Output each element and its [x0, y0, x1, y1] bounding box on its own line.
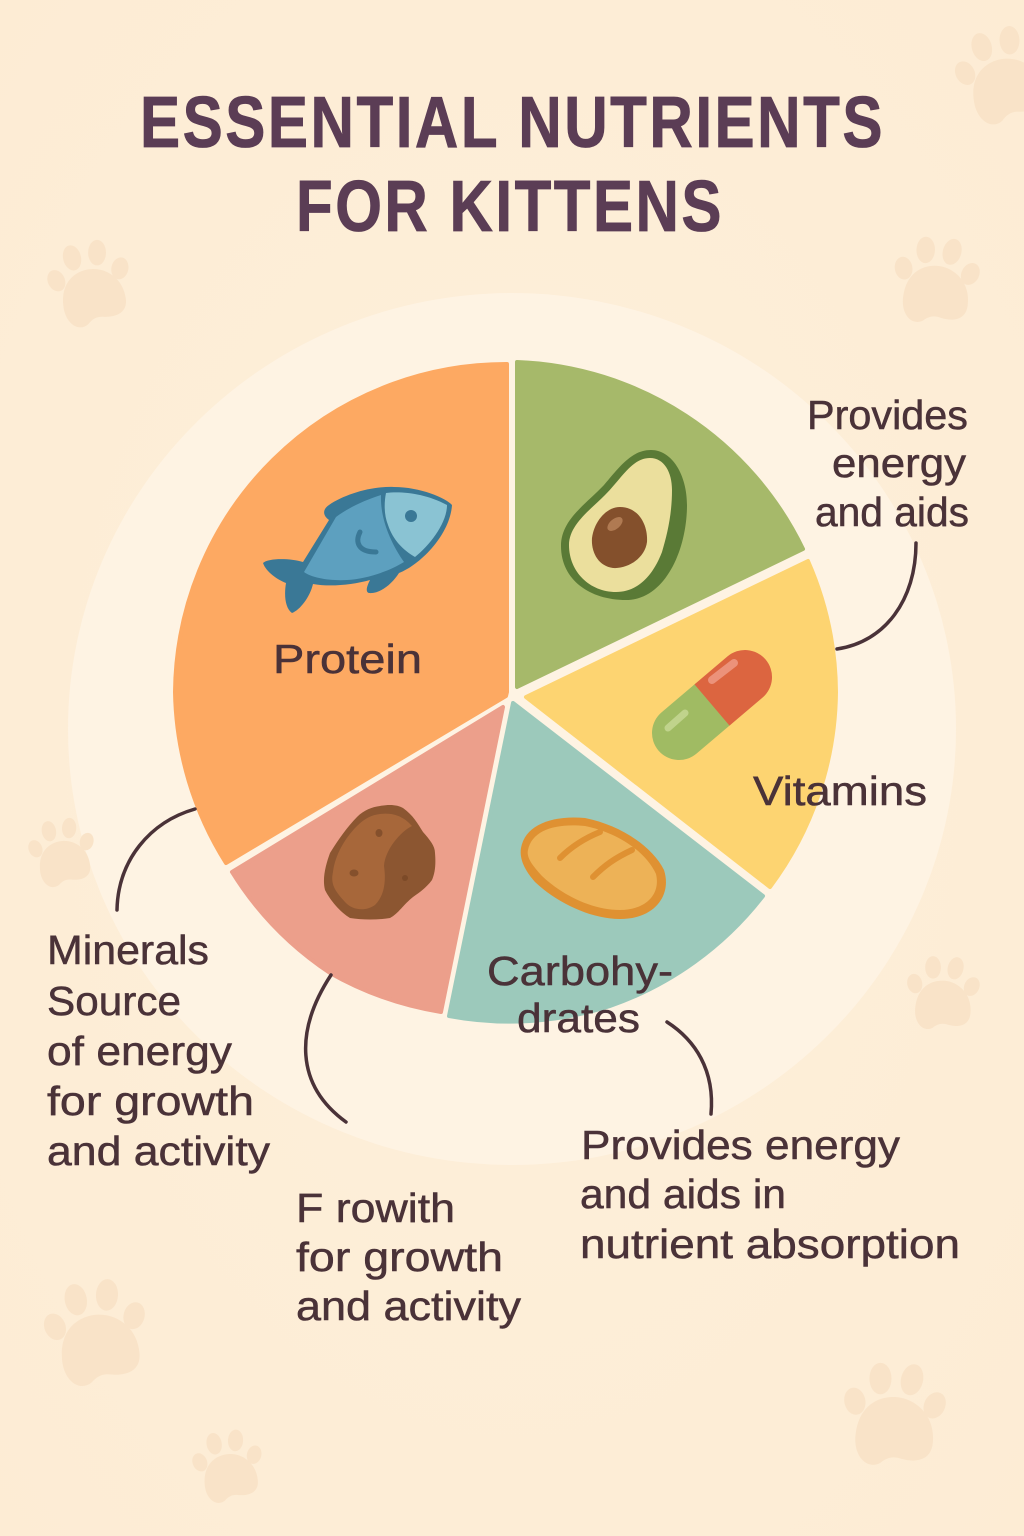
title: ESSENTIAL NUTRIENTS [140, 83, 885, 163]
label: vitamins: Vitamins [753, 768, 927, 814]
title: FOR KITTENS [296, 167, 724, 247]
background circle [68, 293, 956, 1165]
callout: growth: and activity [296, 1283, 522, 1329]
label: carbohydrates: drates [517, 995, 640, 1041]
slice: protein [175, 364, 507, 863]
callout: growth: for growth [296, 1234, 503, 1280]
connector: growth [306, 975, 346, 1122]
callout: minerals [47, 927, 271, 1174]
connector: energy [667, 1022, 712, 1114]
callout: energy: nutrient absorption [580, 1221, 960, 1267]
label: protein: Protein [273, 636, 422, 682]
callout: energy: and aids in [580, 1171, 786, 1217]
callout: minerals: Minerals [47, 927, 209, 973]
connector: top right [837, 543, 916, 649]
callout: minerals: for growth [47, 1078, 254, 1124]
callout: energy: Provides energy [581, 1122, 901, 1168]
slice: minerals [232, 707, 503, 1012]
callout: energy [580, 1122, 960, 1267]
label: carbohydrates [487, 948, 673, 1041]
slice: vitamins [526, 561, 836, 887]
title [140, 83, 885, 247]
callout: top right: Provides [807, 392, 968, 438]
callout: top right: energy [832, 440, 967, 486]
pie chart [175, 362, 836, 1022]
icon: bread [521, 817, 666, 919]
callout: top right: and aids [815, 489, 969, 535]
slice: fats [517, 362, 803, 687]
label: carbohydrates: Carbohy- [487, 948, 673, 994]
icon: mineral rock [324, 805, 435, 920]
callout: minerals: of energy [47, 1028, 233, 1074]
callout: growth [296, 1185, 522, 1329]
slice: carbohydrates [449, 703, 763, 1022]
icon: avocado [561, 450, 687, 600]
callout: growth: F rowith [296, 1185, 455, 1231]
callout: minerals: and activity [47, 1128, 271, 1174]
icon: fish [263, 487, 452, 613]
callout: top right [807, 392, 969, 535]
connector: minerals [117, 809, 195, 910]
callout: minerals: Source [47, 978, 181, 1024]
icon: capsule [668, 650, 772, 733]
